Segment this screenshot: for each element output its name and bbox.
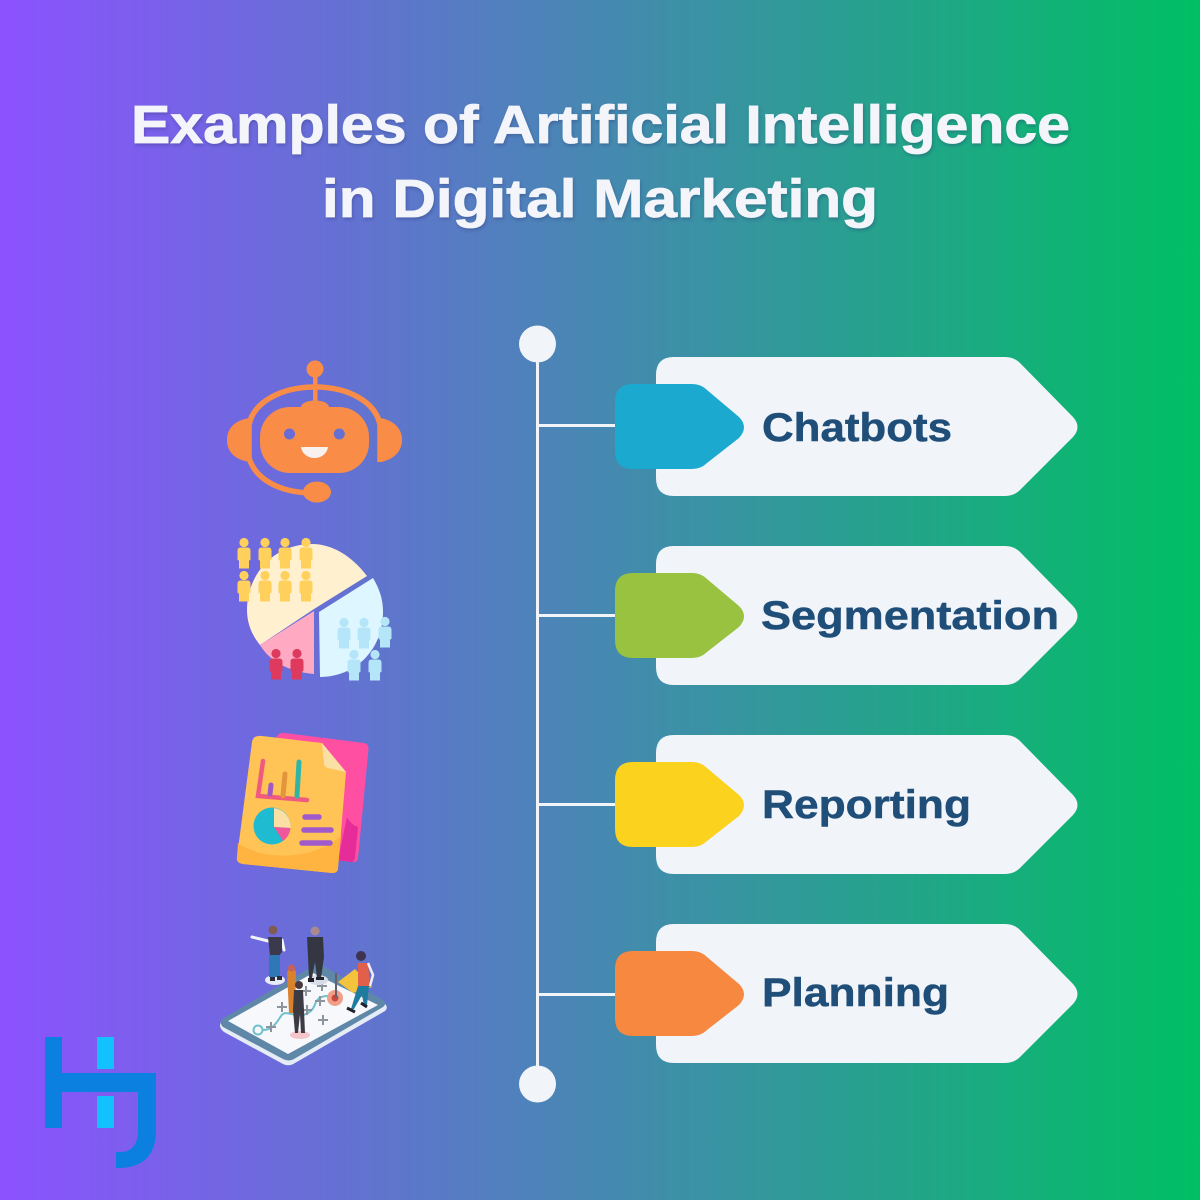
timeline xyxy=(519,326,617,1102)
row: Segmentation xyxy=(615,546,1078,685)
icon: report documents xyxy=(237,733,369,873)
row: Chatbots: Chatbots xyxy=(762,406,952,450)
title xyxy=(131,95,1070,229)
person: man with folder xyxy=(347,951,373,1012)
pencil xyxy=(287,964,296,1013)
icon: segmentation pie chart xyxy=(238,538,392,680)
row: Reporting: Reporting xyxy=(762,783,971,827)
title: Examples of Artificial Intelligence xyxy=(131,95,1070,155)
row: Reporting xyxy=(615,735,1078,874)
icon: planning team on tablet xyxy=(220,926,387,1065)
title: in Digital Marketing xyxy=(322,169,878,229)
person: man in suit xyxy=(307,926,324,982)
row: Planning: Planning xyxy=(762,971,949,1015)
person: man presenting xyxy=(252,926,284,981)
icon: chatbot xyxy=(227,360,402,502)
logo xyxy=(45,1037,156,1168)
person: woman xyxy=(290,981,310,1039)
row: Planning xyxy=(615,924,1078,1063)
row: Chatbots xyxy=(615,357,1078,496)
row: Segmentation: Segmentation xyxy=(761,594,1059,638)
